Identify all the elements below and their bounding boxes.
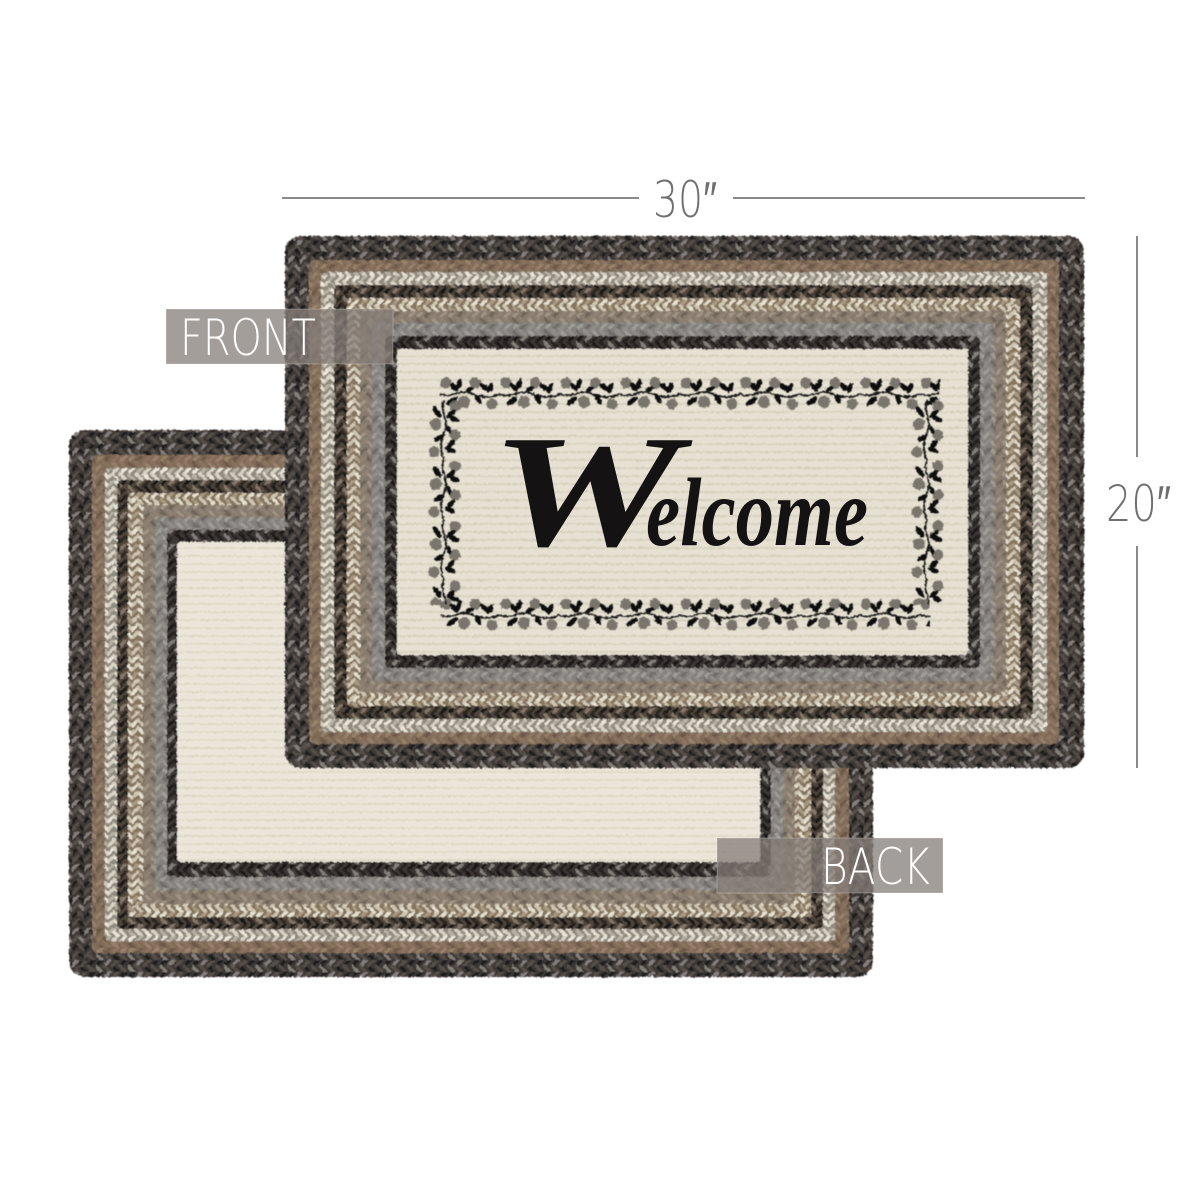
- vine: bottom: [440, 596, 930, 632]
- Welcome lettering: elcome: [646, 459, 868, 567]
- label: BACK: [717, 838, 943, 896]
- vine: right: [910, 400, 946, 605]
- front rug braided border: side runs: [285, 236, 1084, 768]
- vine: left: [427, 400, 463, 605]
- front rug cream center: [397, 349, 968, 655]
- front rug braided border: top and bottom runs: [285, 236, 1084, 768]
- label: BACK: BACK: [821, 838, 930, 896]
- back rug plain cream center: [177, 542, 760, 862]
- width dimension: 30 inches: 30″: [653, 171, 717, 229]
- back rug braided border: top and bottom runs: [69, 430, 873, 977]
- back rug braided border: side runs: [69, 430, 873, 977]
- label: FRONT: FRONT: [180, 309, 316, 367]
- vine: top: [440, 375, 940, 411]
- height dimension: 20 inches: 20″: [1106, 475, 1171, 533]
- floral vine frame: [427, 375, 946, 632]
- Welcome lettering: W: [490, 402, 693, 580]
- back rug: [69, 430, 873, 977]
- front rug: [285, 236, 1084, 768]
